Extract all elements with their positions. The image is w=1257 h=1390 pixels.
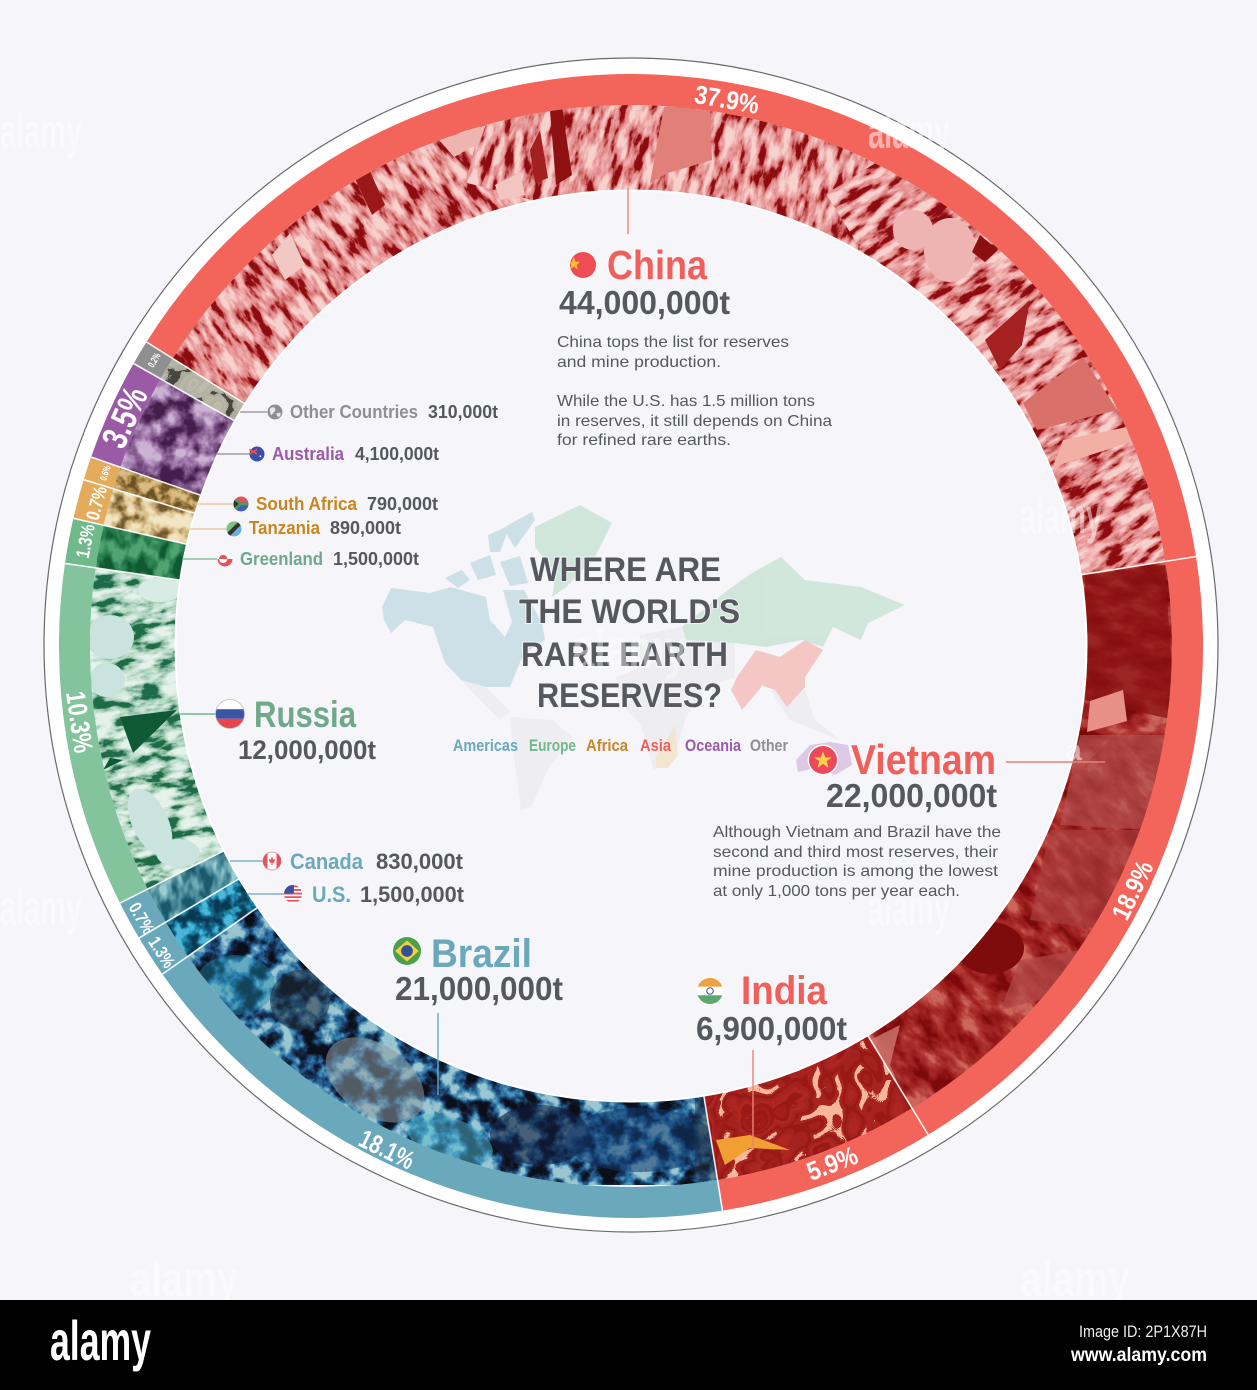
- wedge: Vietnam: [868, 556, 1204, 1135]
- flag: U.S.: [284, 885, 302, 903]
- flag: India: [697, 978, 723, 1004]
- wedge: India: [695, 1030, 928, 1211]
- map: Central and South America: [461, 680, 573, 810]
- flag: South Africa: [234, 496, 248, 512]
- footer bar: [0, 1300, 1257, 1390]
- leader line: Russia: [180, 713, 216, 715]
- flag: Canada: [263, 852, 281, 870]
- flag: Greenland: [218, 552, 232, 566]
- percent: Russia: 10.3%: [60, 689, 98, 755]
- value: Brazil: 21,000,000t: [395, 970, 563, 1007]
- watermarks: a: [1065, 734, 1082, 767]
- percent: South Africa: 0.6%: [98, 464, 114, 482]
- flag: Australia: [250, 446, 264, 462]
- image id: Image ID: 2P1X87H: [1079, 1322, 1207, 1341]
- map: southern Africa: [656, 725, 678, 768]
- label: Tanzania: Tanzania: [249, 517, 321, 538]
- map: China and India: [731, 640, 823, 710]
- value: Australia: 4,100,000t: [355, 443, 439, 464]
- percent: Greenland: 1.3%: [73, 522, 100, 560]
- leader line: Vietnam: [1006, 761, 1105, 763]
- legend: regions: [453, 736, 788, 755]
- label: India: India: [741, 969, 828, 1013]
- value: Russia: 12,000,000t: [238, 735, 376, 765]
- watermarks: alamy: [0, 103, 82, 159]
- description: China: in reserves, it still depends on China: [557, 413, 832, 430]
- leader line: South Africa: [195, 503, 233, 505]
- callout: India: [696, 969, 847, 1150]
- value: Vietnam: 22,000,000t: [826, 777, 997, 814]
- wedge: Brazil: [162, 900, 725, 1218]
- value: Greenland: 1,500,000t: [333, 548, 419, 569]
- watermarks: alamy: [868, 103, 950, 159]
- value: China: 44,000,000t: [559, 284, 730, 321]
- outer ring outline: [44, 58, 1218, 1232]
- leader line: Greenland: [182, 558, 217, 560]
- wedge: United States: [139, 875, 260, 974]
- leader line: India: [752, 1050, 754, 1150]
- callout: South Africa: [195, 496, 438, 513]
- label: Australia: Australia: [272, 443, 345, 464]
- footer url: www.alamy.com: [1070, 1345, 1207, 1366]
- label: Canada: Canada: [290, 849, 364, 874]
- legend: regions: Oceania: [685, 736, 741, 755]
- description: China: China tops the list for reserves: [557, 334, 789, 351]
- legend: regions: Africa: [586, 736, 628, 755]
- label: China: China: [607, 242, 708, 288]
- chart centre disc: [59, 74, 1203, 1218]
- percent: Vietnam: 18.9%: [1105, 856, 1159, 925]
- footer logo: alamy: [50, 1309, 151, 1372]
- leader line: U.S.: [248, 893, 284, 895]
- callout: U.S.: [248, 885, 464, 906]
- title: THE WORLD'S: [519, 593, 740, 631]
- watermarks: alamy: [1020, 1251, 1130, 1307]
- value: U.S.: 1,500,000t: [360, 882, 465, 907]
- callout: Brazil: [393, 932, 563, 1095]
- flag: Russia: [216, 700, 244, 728]
- percent: U.S.: 1.3%: [144, 933, 179, 972]
- description: Vietnam: at only 1,000 tons per year each.: [713, 883, 960, 900]
- flag: Brazil: [393, 937, 421, 965]
- title: RARE EARTH: [521, 636, 728, 674]
- legend: regions: Other: [750, 736, 788, 755]
- title: WHERE ARE: [530, 551, 721, 589]
- percent: India: 5.9%: [802, 1140, 862, 1187]
- value: Tanzania: 890,000t: [330, 517, 401, 538]
- map: Eurasia: [682, 557, 905, 647]
- watermarks: alamy: [0, 880, 82, 936]
- wedge: Greenland: [65, 518, 188, 582]
- callout: Other Countries: [240, 401, 498, 422]
- watermarks: [0, 103, 1130, 1307]
- title: RESERVES?: [537, 677, 722, 715]
- description: China: and mine production.: [557, 354, 721, 371]
- description: Vietnam: Although Vietnam and Brazil have the: [713, 824, 1001, 841]
- wedge: Canada: [120, 848, 241, 938]
- value: South Africa: 790,000t: [367, 493, 438, 514]
- flag: Vietnam: [808, 745, 838, 775]
- value: Other Countries: 310,000t: [428, 401, 498, 422]
- watermarks: alamy: [1020, 488, 1102, 544]
- leader line: Canada: [230, 860, 263, 862]
- percent: Canada: 0.7%: [125, 899, 158, 938]
- callout: Vietnam: [713, 736, 1105, 900]
- leader line: Other Countries: [240, 411, 267, 413]
- callout: China: [557, 188, 832, 449]
- percent: Brazil: 18.1%: [354, 1123, 419, 1176]
- map: North America: [382, 512, 545, 687]
- label: Vietnam: Vietnam: [851, 736, 996, 783]
- map: Africa: [616, 660, 703, 770]
- percentage labels: [60, 79, 1159, 1187]
- callout: Australia: [216, 443, 439, 464]
- wedge: Russia: [59, 564, 222, 903]
- icon: globe: [268, 404, 282, 420]
- leader line: China: [627, 188, 629, 234]
- map: Southeast Asia: [770, 690, 840, 740]
- label: South Africa: South Africa: [256, 493, 358, 514]
- legend: regions: Europe: [529, 736, 576, 755]
- label: U.S.: U.S.: [312, 882, 351, 907]
- percent: China: 37.9%: [692, 79, 762, 120]
- wedge: Other Countries: [134, 342, 248, 423]
- label: Brazil: Brazil: [431, 932, 532, 976]
- description: China: [557, 334, 832, 449]
- watermarks: alamy: [868, 880, 950, 936]
- map: Australia: [796, 742, 852, 775]
- description: Vietnam: [713, 824, 1001, 900]
- title: [519, 551, 740, 715]
- label: Russia: Russia: [254, 694, 356, 735]
- map: Greenland: [535, 505, 612, 597]
- wedge: South Africa: [84, 457, 202, 515]
- value: India: 6,900,000t: [696, 1010, 847, 1047]
- value: Canada: 830,000t: [376, 849, 464, 874]
- percent: Other: 0.2%: [146, 351, 164, 370]
- description: China: While the U.S. has 1.5 million tons: [557, 393, 815, 410]
- leader line: Tanzania: [190, 528, 226, 530]
- label: Greenland: Greenland: [240, 548, 323, 569]
- legend: regions: Americas: [453, 736, 518, 755]
- callout: Russia: [180, 694, 376, 765]
- legend: regions: Asia: [640, 736, 671, 755]
- callout: Canada: [230, 852, 463, 872]
- watermarks: alamy: [130, 1251, 238, 1307]
- label: Other Countries: Other Countries: [290, 401, 418, 422]
- percent: Australia: 3.5%: [93, 381, 156, 454]
- flag: Tanzania: [226, 522, 242, 536]
- callout: Greenland: [182, 552, 419, 568]
- percent: Tanzania: 0.7%: [83, 484, 112, 522]
- centre watermark: alamy: [572, 617, 687, 680]
- wedge: China: [146, 74, 1196, 574]
- description: Vietnam: mine production is among the lowest: [713, 863, 999, 880]
- wedge: Australia: [91, 364, 236, 496]
- flag: China: [570, 252, 596, 278]
- world map: [382, 505, 905, 810]
- wedge: Tanzania: [73, 480, 197, 547]
- description: Vietnam: second and third most reserves, their: [713, 844, 999, 861]
- map: Europe and Middle East: [640, 627, 735, 690]
- leader line: Brazil: [437, 1013, 439, 1095]
- description: China: for refined rare earths.: [557, 432, 731, 449]
- leader line: Australia: [216, 453, 250, 455]
- callout: Tanzania: [190, 520, 401, 537]
